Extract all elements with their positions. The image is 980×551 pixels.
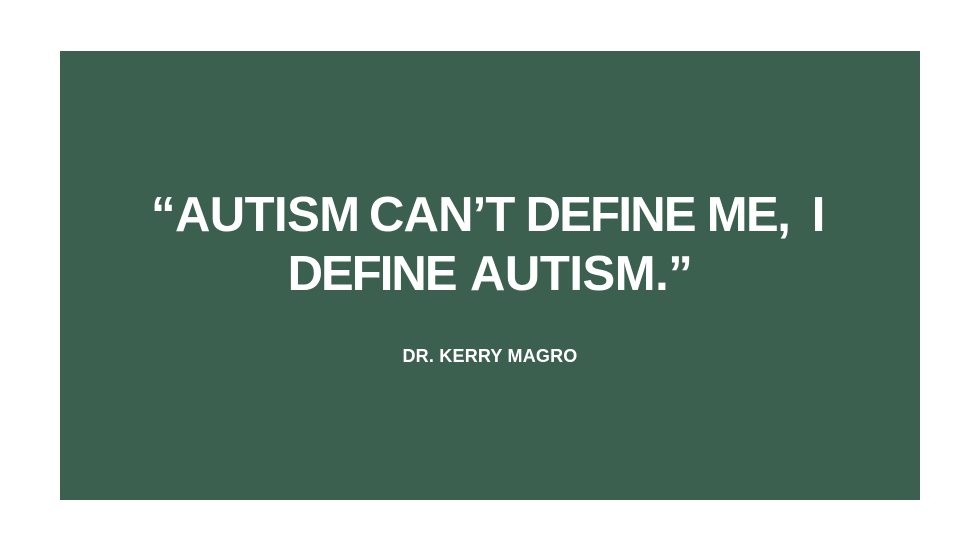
quote heading: DEFINE	[288, 247, 456, 301]
quote heading: “AUTISM	[151, 188, 359, 242]
quote heading: CAN’T	[369, 188, 514, 242]
attribution: DR. KERRY MAGRO	[402, 346, 578, 366]
quote heading: I	[812, 188, 825, 242]
panel: green background	[60, 51, 920, 500]
quote heading: AUTISM.”	[470, 247, 692, 301]
quote heading: ME,	[707, 188, 789, 242]
quote heading: DEFINE	[526, 188, 695, 242]
